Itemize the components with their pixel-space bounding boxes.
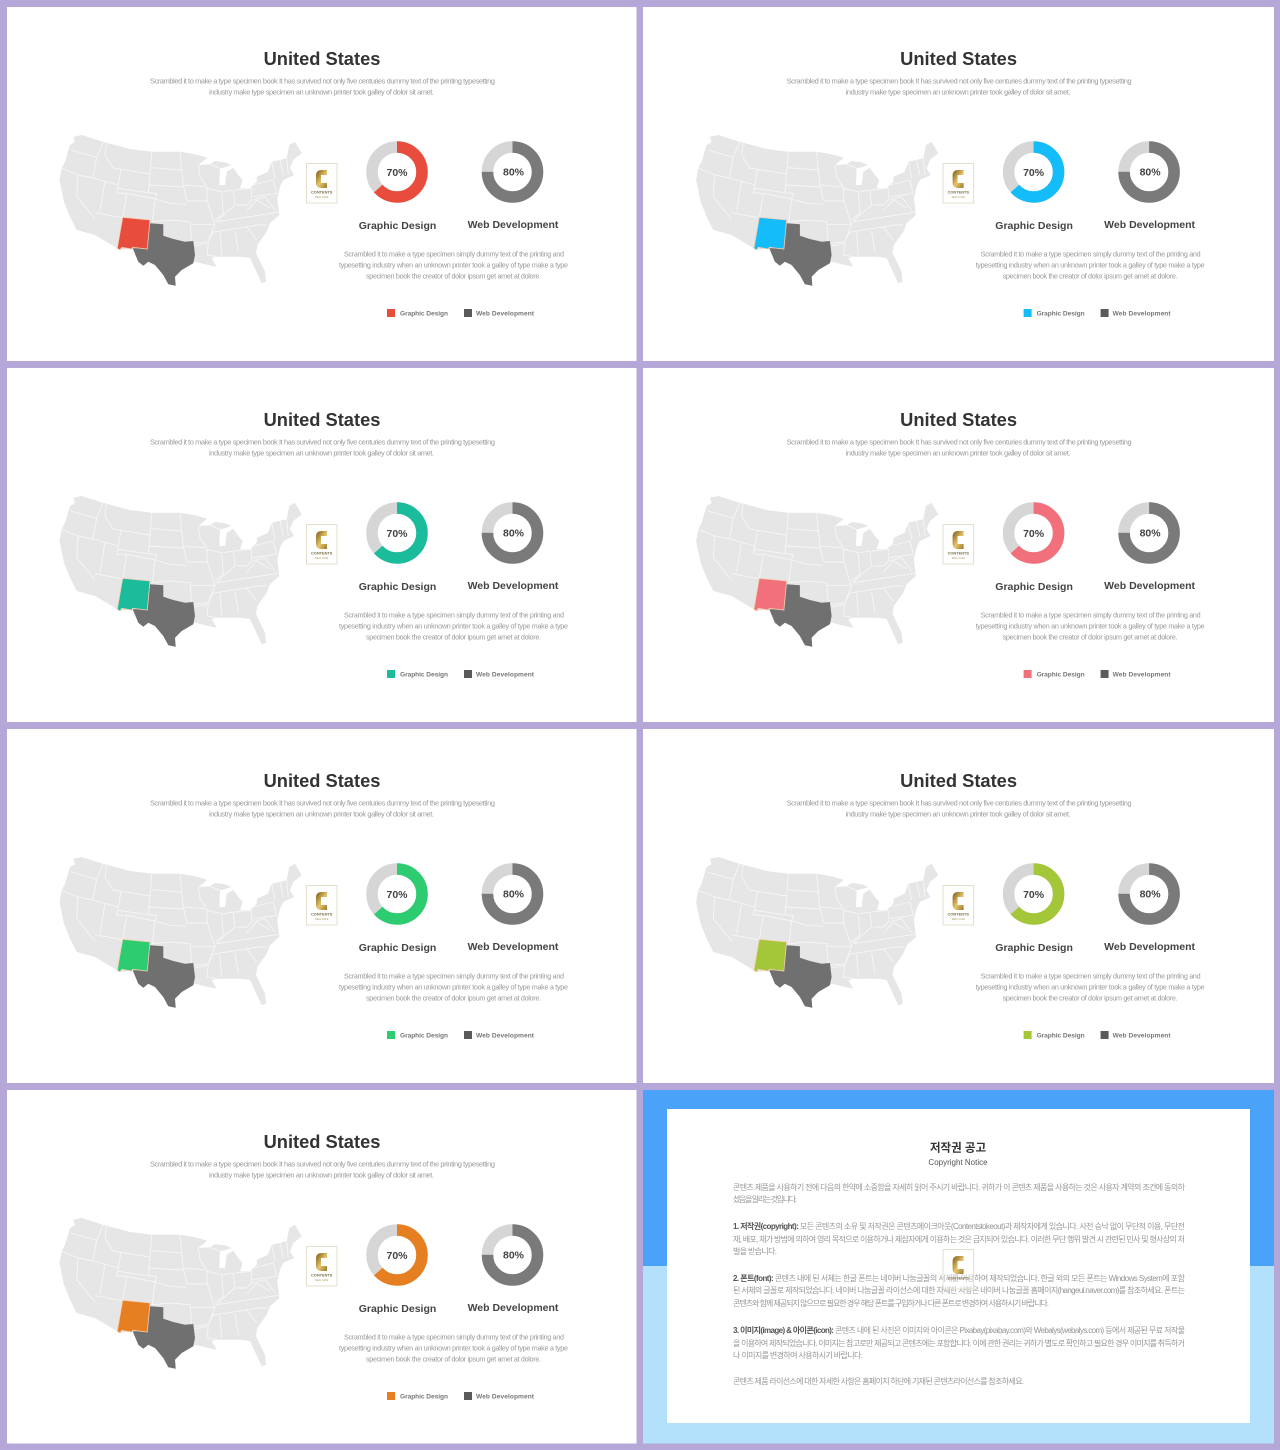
logo badge: REAL CAFE bbox=[315, 1279, 329, 1282]
intro text bbox=[787, 438, 1132, 458]
section 2: font: 콘텐츠와 함께 제공되지 않으므로 필요한 경우 해당 폰트를 구입하거나 다른 폰트로 변경하여 사용하시기 바랍니다. bbox=[733, 1298, 1049, 1308]
legend bbox=[1024, 670, 1171, 678]
intro text bbox=[787, 798, 1132, 818]
panel: teal slide bbox=[7, 368, 636, 722]
description text: Scrambled it to make a type specimen simply dummy text of the printing and bbox=[981, 610, 1201, 620]
legend bbox=[387, 309, 535, 317]
donut: graphic design 70% bbox=[1009, 508, 1059, 558]
donut: web development 80% bbox=[488, 508, 538, 558]
donut: web development 80%: 80% bbox=[1140, 528, 1161, 540]
legend: Web Development bbox=[1113, 1032, 1171, 1039]
label: graphic design: Graphic Design bbox=[359, 1303, 436, 1315]
description text: typesetting industry when an unknown printer took a galley of type make a type bbox=[339, 1344, 568, 1352]
logo badge: CONTENTS bbox=[948, 912, 969, 916]
legend: Web Development bbox=[476, 671, 535, 678]
label: web development: Web Development bbox=[1104, 219, 1196, 231]
title: United States bbox=[264, 770, 380, 791]
description text: typesetting industry when an unknown printer took a galley of type make a type bbox=[339, 622, 568, 630]
legend: Graphic Design bbox=[400, 310, 448, 317]
intro text: Scrambled it to make a type specimen book It has survived not only five centuries dummy text of the printing typesetting bbox=[787, 76, 1132, 86]
section 3: image and icon: 3. 이미지(image) & 아이콘(icon): 콘텐츠 내에 된 사진은 이미지와 아이콘은 Pixabay(pixabay.com)와 Webalys(webalys.com) 등에서 제공된 무료 저작물 bbox=[733, 1325, 1185, 1335]
notice subtitle: Copyright Notice bbox=[928, 1158, 988, 1167]
donut: web development 80%: 80% bbox=[503, 528, 525, 540]
intro text: industry make type specimen an unknown printer took galley of dolor sit amet. bbox=[209, 1170, 434, 1180]
donut: graphic design 70% bbox=[1009, 147, 1059, 197]
donut: graphic design 70%: 70% bbox=[386, 167, 408, 179]
legend: Web Development bbox=[476, 310, 535, 317]
description text: specimen book the creator of dolor ipsum get amet at dolore. bbox=[366, 272, 541, 280]
US map with highlighted states bbox=[696, 135, 938, 286]
section 3: image and icon bbox=[733, 1325, 1185, 1360]
description text: specimen book the creator of dolor ipsum get amet at dolore. bbox=[1003, 994, 1178, 1002]
intro text: industry make type specimen an unknown printer took galley of dolor sit amet. bbox=[209, 448, 434, 458]
intro text: Scrambled it to make a type specimen book It has survived not only five centuries dummy text of the printing typesetting bbox=[787, 438, 1132, 446]
intro text: industry make type specimen an unknown printer took galley of dolor sit amet. bbox=[209, 88, 434, 96]
logo badge: CONTENTS bbox=[311, 550, 333, 556]
section 1: copyright bbox=[733, 1221, 1185, 1256]
US map with highlighted states bbox=[696, 857, 938, 1008]
donut: graphic design 70%: 70% bbox=[386, 528, 408, 540]
label: graphic design: Graphic Design bbox=[995, 220, 1073, 232]
section 2: font: 된 서체의 글꼴로 제작되었습니다. 네이버 나눔글꼴 라이선스에 대한 자세한 사항은 네이버 나눔글꼴 홈페이지(hangeul.naver.com)를 참조하세요. 폰트는 bbox=[733, 1285, 1185, 1295]
US map with highlighted states bbox=[60, 496, 302, 647]
intro text bbox=[787, 76, 1132, 96]
donut: web development 80%: 80% bbox=[503, 1250, 525, 1262]
description text bbox=[976, 610, 1205, 642]
description text: Scrambled it to make a type specimen simply dummy text of the printing and bbox=[344, 610, 564, 620]
donut: graphic design 70% bbox=[372, 1230, 422, 1280]
panel: green slide bbox=[7, 729, 636, 1083]
logo badge: CONTENTS bbox=[311, 190, 333, 194]
intro text: industry make type specimen an unknown printer took galley of dolor sit amet. bbox=[209, 810, 434, 818]
legend bbox=[387, 1392, 535, 1400]
intro text bbox=[150, 76, 495, 96]
intro text: industry make type specimen an unknown printer took galley of dolor sit amet. bbox=[846, 448, 1071, 458]
description text: typesetting industry when an unknown printer took a galley of type make a type bbox=[339, 982, 568, 992]
label: web development: Web Development bbox=[468, 1302, 559, 1314]
label: web development: Web Development bbox=[1104, 941, 1196, 953]
logo badge: REAL CAFE bbox=[315, 918, 329, 921]
US map with highlighted states bbox=[60, 857, 302, 1008]
description text: specimen book the creator of dolor ipsum get amet at dolore. bbox=[366, 994, 541, 1002]
description text: specimen book the creator of dolor ipsum get amet at dolore. bbox=[1003, 632, 1178, 642]
description text: Scrambled it to make a type specimen simply dummy text of the printing and bbox=[344, 250, 564, 258]
title: United States bbox=[264, 409, 380, 430]
logo watermark: CONTENTS bbox=[948, 1276, 969, 1280]
logo badge: CONTENTS bbox=[311, 912, 333, 916]
logo badge bbox=[306, 164, 337, 203]
section 3: image and icon: 을 이용하여 제작되었습니다. 이미지는 참고로만 제공되고 콘텐츠에는 포함합니다. 이에 관한 권리는 귀하가 별도로 확인하고 필요한 경우 이미지를 취득하거 bbox=[733, 1338, 1185, 1348]
legend: Web Development bbox=[1113, 310, 1171, 317]
label: graphic design: Graphic Design bbox=[995, 581, 1073, 593]
legend: Graphic Design bbox=[1037, 310, 1085, 317]
US map with highlighted states bbox=[60, 135, 302, 286]
closing line: 콘텐츠 제품 라이선스에 대한 자세한 사항은 홈페이지 하단에 기재된 콘텐츠라이선스를 참조하세요. bbox=[733, 1376, 1024, 1386]
title: United States bbox=[900, 409, 1017, 430]
logo badge: CONTENTS bbox=[311, 1272, 333, 1278]
legend: Graphic Design bbox=[1037, 1032, 1085, 1039]
donut: graphic design 70% bbox=[372, 508, 422, 558]
intro paragraph: 콘텐츠 제품을 사용하기 전에 다음의 한약에 소중함을 자세히 읽어 주시기 바랍니다. 귀하가 이 콘텐츠 제품을 사용하는 것은 사용자 계약의 조건에 동의하 bbox=[733, 1182, 1186, 1192]
section 3: image and icon: 나 이미지를 변경하여 사용하시기 바랍니다. bbox=[733, 1350, 863, 1360]
logo badge: REAL CAFE bbox=[315, 196, 329, 199]
label: web development: Web Development bbox=[468, 219, 559, 231]
donut: web development 80%: 80% bbox=[1140, 166, 1161, 178]
description text: typesetting industry when an unknown printer took a galley of type make a type bbox=[976, 622, 1205, 630]
legend: Web Development bbox=[476, 1032, 535, 1039]
section 2: font: 2. 폰트(font): 콘텐츠 내에 된 서체는 한글 폰트는 네이버 나눔글꼴의 서체를 이용하여 제작되었습니다. 한글 외의 모든 폰트는 Windows System에 포함 bbox=[733, 1273, 1186, 1283]
donut: graphic design 70% bbox=[372, 869, 422, 919]
title: United States bbox=[900, 770, 1017, 791]
donut: graphic design 70%: 70% bbox=[1023, 528, 1045, 540]
intro text bbox=[150, 798, 495, 818]
description text: specimen book the creator of dolor ipsum get amet at dolore. bbox=[366, 1354, 541, 1364]
intro paragraph bbox=[733, 1182, 1186, 1204]
legend: Graphic Design bbox=[400, 1393, 448, 1400]
logo badge: REAL CAFE bbox=[952, 918, 965, 921]
logo watermark bbox=[943, 1250, 974, 1289]
label: web development: Web Development bbox=[468, 941, 559, 953]
donut: web development 80% bbox=[488, 869, 538, 919]
donut: web development 80%: 80% bbox=[503, 166, 525, 178]
logo badge bbox=[943, 164, 974, 203]
panel: copyright notice bbox=[643, 1090, 1274, 1444]
section 1: copyright: 재, 배포, 재가 방법에 의하여 영리 목적으로 이용하거나 제삼자에게 이용하는 것은 금지되어 있습니다. 이러한 무단 행위 발견 시 관련된 민사 및 형사상의 처 bbox=[733, 1234, 1185, 1244]
donut: graphic design 70%: 70% bbox=[386, 889, 408, 901]
legend: Graphic Design bbox=[1037, 671, 1085, 678]
legend: Web Development bbox=[1113, 671, 1171, 678]
intro text bbox=[150, 438, 495, 458]
donut: graphic design 70% bbox=[1009, 869, 1059, 919]
logo badge: REAL CAFE bbox=[952, 557, 965, 560]
title: United States bbox=[264, 48, 380, 69]
description text: specimen book the creator of dolor ipsum get amet at dolore. bbox=[1003, 272, 1178, 280]
description text: typesetting industry when an unknown printer took a galley of type make a type bbox=[976, 260, 1205, 270]
section 1: copyright: 벌을 받습니다. bbox=[733, 1246, 777, 1256]
donut: web development 80% bbox=[1124, 508, 1174, 558]
description text bbox=[339, 250, 568, 280]
donut: graphic design 70% bbox=[372, 147, 422, 197]
intro text: Scrambled it to make a type specimen book It has survived not only five centuries dummy text of the printing typesetting bbox=[150, 76, 495, 86]
description text: specimen book the creator of dolor ipsum get amet at dolore. bbox=[366, 632, 541, 642]
donut: web development 80%: 80% bbox=[1140, 888, 1161, 900]
logo badge bbox=[943, 886, 974, 925]
description text: Scrambled it to make a type specimen simply dummy text of the printing and bbox=[344, 972, 564, 980]
legend bbox=[1024, 309, 1171, 317]
description text: typesetting industry when an unknown printer took a galley of type make a type bbox=[976, 982, 1205, 992]
panel: lime slide bbox=[643, 729, 1274, 1083]
intro text: industry make type specimen an unknown printer took galley of dolor sit amet. bbox=[846, 88, 1071, 96]
description text bbox=[339, 972, 568, 1002]
label: web development: Web Development bbox=[468, 580, 559, 592]
title: United States bbox=[900, 48, 1017, 69]
logo badge bbox=[306, 886, 337, 925]
donut: web development 80% bbox=[488, 147, 538, 197]
description text bbox=[976, 250, 1205, 280]
donut: graphic design 70%: 70% bbox=[1023, 889, 1045, 901]
description text: typesetting industry when an unknown printer took a galley of type make a type bbox=[339, 260, 568, 270]
section 2: font bbox=[733, 1273, 1186, 1308]
intro text: Scrambled it to make a type specimen book It has survived not only five centuries dummy text of the printing typesetting bbox=[150, 1160, 495, 1168]
donut: web development 80% bbox=[488, 1230, 538, 1280]
label: graphic design: Graphic Design bbox=[359, 220, 436, 232]
donut: graphic design 70%: 70% bbox=[386, 1250, 408, 1262]
description text: Scrambled it to make a type specimen simply dummy text of the printing and bbox=[981, 250, 1201, 258]
legend bbox=[387, 1031, 535, 1039]
description text bbox=[339, 610, 568, 642]
intro text: Scrambled it to make a type specimen book It has survived not only five centuries dummy text of the printing typesetting bbox=[150, 798, 495, 808]
label: graphic design: Graphic Design bbox=[995, 942, 1073, 954]
description text bbox=[976, 972, 1205, 1002]
label: graphic design: Graphic Design bbox=[359, 942, 436, 954]
notice title: 저작권 공고 bbox=[930, 1140, 986, 1154]
donut: web development 80%: 80% bbox=[503, 888, 525, 900]
panel: pink slide bbox=[643, 368, 1274, 722]
logo badge bbox=[306, 524, 337, 564]
logo badge: REAL CAFE bbox=[315, 557, 329, 560]
logo badge: CONTENTS bbox=[948, 550, 969, 556]
panel: red slide bbox=[7, 7, 636, 361]
section 1: copyright: 1. 저작권(copyright): 모든 콘텐츠의 소유 및 저작권은 콘텐츠메이크아웃(Contentstokeout)과 제작자에게 있습니다. 사전 승낙 없이 무단적 이용, 무단전 bbox=[733, 1221, 1185, 1231]
legend: Graphic Design bbox=[400, 671, 448, 678]
panel: orange slide bbox=[7, 1090, 636, 1444]
logo badge: CONTENTS bbox=[948, 190, 969, 194]
logo badge bbox=[306, 1246, 337, 1286]
donut: web development 80% bbox=[1124, 869, 1174, 919]
legend bbox=[387, 670, 535, 678]
title: United States bbox=[264, 1131, 380, 1152]
label: graphic design: Graphic Design bbox=[359, 581, 436, 593]
logo badge: REAL CAFE bbox=[952, 196, 965, 199]
donut: web development 80% bbox=[1124, 147, 1174, 197]
description text: Scrambled it to make a type specimen simply dummy text of the printing and bbox=[981, 972, 1201, 980]
description text bbox=[339, 1332, 568, 1364]
US map with highlighted states bbox=[60, 1218, 302, 1369]
description text: Scrambled it to make a type specimen simply dummy text of the printing and bbox=[344, 1332, 564, 1342]
intro text: Scrambled it to make a type specimen book It has survived not only five centuries dummy text of the printing typesetting bbox=[787, 798, 1132, 808]
intro text: industry make type specimen an unknown printer took galley of dolor sit amet. bbox=[846, 810, 1071, 818]
intro paragraph: 셨음을 알리는 것입니다. bbox=[733, 1194, 797, 1204]
legend: Graphic Design bbox=[400, 1032, 448, 1039]
logo badge bbox=[943, 524, 974, 564]
legend bbox=[1024, 1031, 1171, 1039]
US map with highlighted states bbox=[696, 496, 938, 647]
legend: Web Development bbox=[476, 1393, 535, 1400]
panel: blue slide bbox=[643, 7, 1274, 361]
label: web development: Web Development bbox=[1104, 580, 1196, 592]
intro text: Scrambled it to make a type specimen book It has survived not only five centuries dummy text of the printing typesetting bbox=[150, 438, 495, 446]
intro text bbox=[150, 1160, 495, 1180]
donut: graphic design 70%: 70% bbox=[1023, 167, 1045, 179]
